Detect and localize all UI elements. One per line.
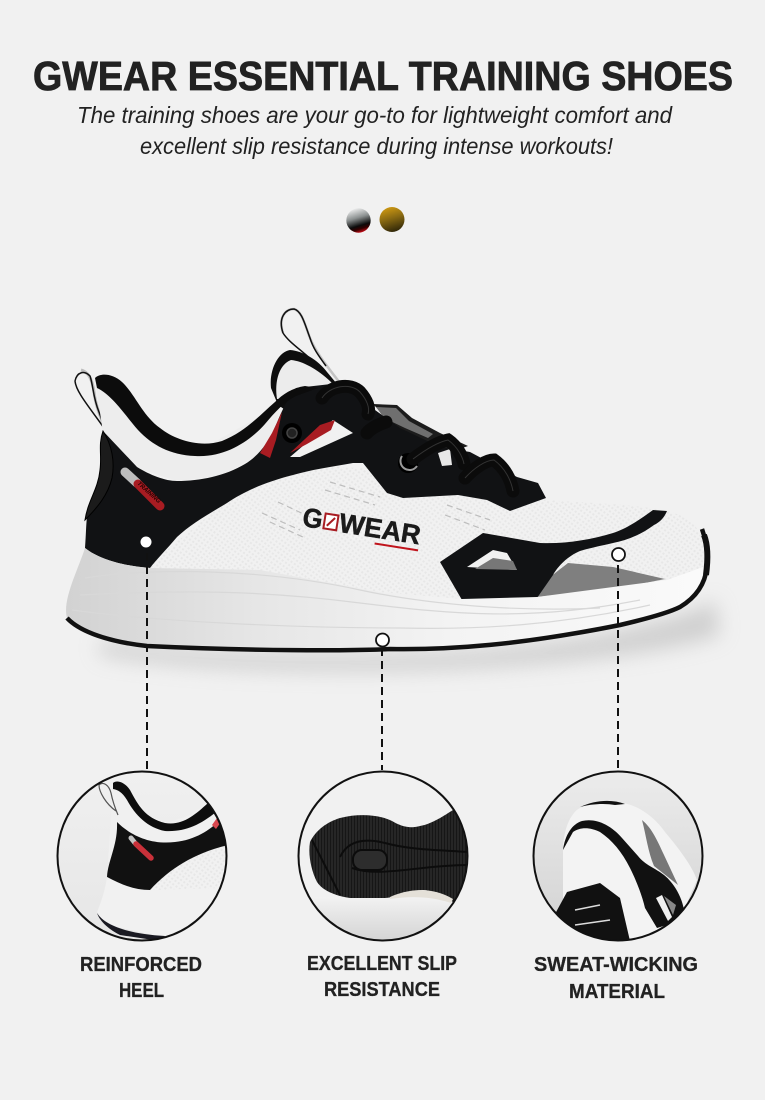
lace gap, white bbox=[438, 449, 452, 466]
label: excellent slip resistance bbox=[307, 953, 457, 1001]
collar binding, black bbox=[95, 375, 318, 456]
label: sweat-wicking material: MATERIAL bbox=[569, 981, 665, 1003]
tongue bbox=[373, 404, 468, 456]
detail circle: sweat-wicking material bbox=[533, 771, 703, 941]
label: reinforced heel: REINFORCED bbox=[80, 954, 202, 976]
tongue pull loop bbox=[281, 309, 340, 383]
grey toe panel bbox=[537, 563, 665, 597]
tongue collar piece bbox=[271, 350, 342, 420]
lace ribs bbox=[322, 386, 513, 491]
marker: mesh bbox=[612, 548, 625, 561]
outsole bbox=[67, 529, 707, 650]
detail circle: outsole bbox=[298, 771, 469, 941]
marker: outsole bbox=[376, 634, 389, 646]
heel label: TRAINING bbox=[136, 481, 161, 505]
knit upper bbox=[140, 465, 705, 601]
midsole bbox=[66, 548, 703, 650]
collar lining, white bbox=[96, 385, 280, 481]
illustration: training shoe bbox=[66, 309, 707, 650]
swatch: olive gold bbox=[380, 207, 404, 232]
label: sweat-wicking material: SWEAT-WICKING bbox=[534, 954, 698, 976]
brand logo bbox=[300, 502, 423, 551]
brand logo: G bbox=[301, 502, 325, 535]
detail circle: reinforced heel bbox=[57, 771, 228, 941]
label: excellent slip resistance: EXCELLENT SLIP bbox=[307, 953, 457, 975]
heel pull tab bbox=[75, 370, 107, 434]
knit stitching bbox=[262, 482, 490, 538]
colour swatches bbox=[346, 207, 404, 233]
laces bbox=[322, 386, 513, 491]
label: excellent slip resistance: RESISTANCE bbox=[324, 979, 440, 1001]
callout line: mesh bbox=[617, 565, 619, 770]
heel counter edge panel bbox=[85, 431, 113, 520]
midsole sculpting bbox=[72, 572, 650, 628]
eyelet, front bbox=[398, 453, 418, 473]
black toe overlay bbox=[440, 510, 667, 600]
swatch: white, black and red bbox=[346, 208, 371, 233]
subtitle: The training shoes are your go-to for lightweight comfort and bbox=[77, 102, 673, 128]
subtitle bbox=[77, 102, 673, 159]
black heel counter and lace saddle bbox=[85, 383, 546, 568]
floor shadow bbox=[100, 600, 720, 671]
brand logo: WEAR bbox=[337, 508, 423, 550]
heel label bbox=[125, 472, 161, 506]
label: reinforced heel: HEEL bbox=[119, 980, 164, 1002]
side window with red accent bbox=[290, 420, 353, 457]
marker: heel bbox=[140, 536, 152, 548]
eyelet, rear bbox=[282, 423, 302, 443]
callout line: outsole bbox=[381, 648, 383, 770]
toe overlay window bbox=[467, 550, 517, 570]
red collar stripe bbox=[260, 412, 282, 458]
label: reinforced heel bbox=[80, 954, 202, 1002]
subtitle: excellent slip resistance during intense workouts! bbox=[140, 133, 614, 159]
callout line: heel bbox=[146, 553, 148, 770]
label: sweat-wicking material bbox=[534, 954, 698, 1003]
